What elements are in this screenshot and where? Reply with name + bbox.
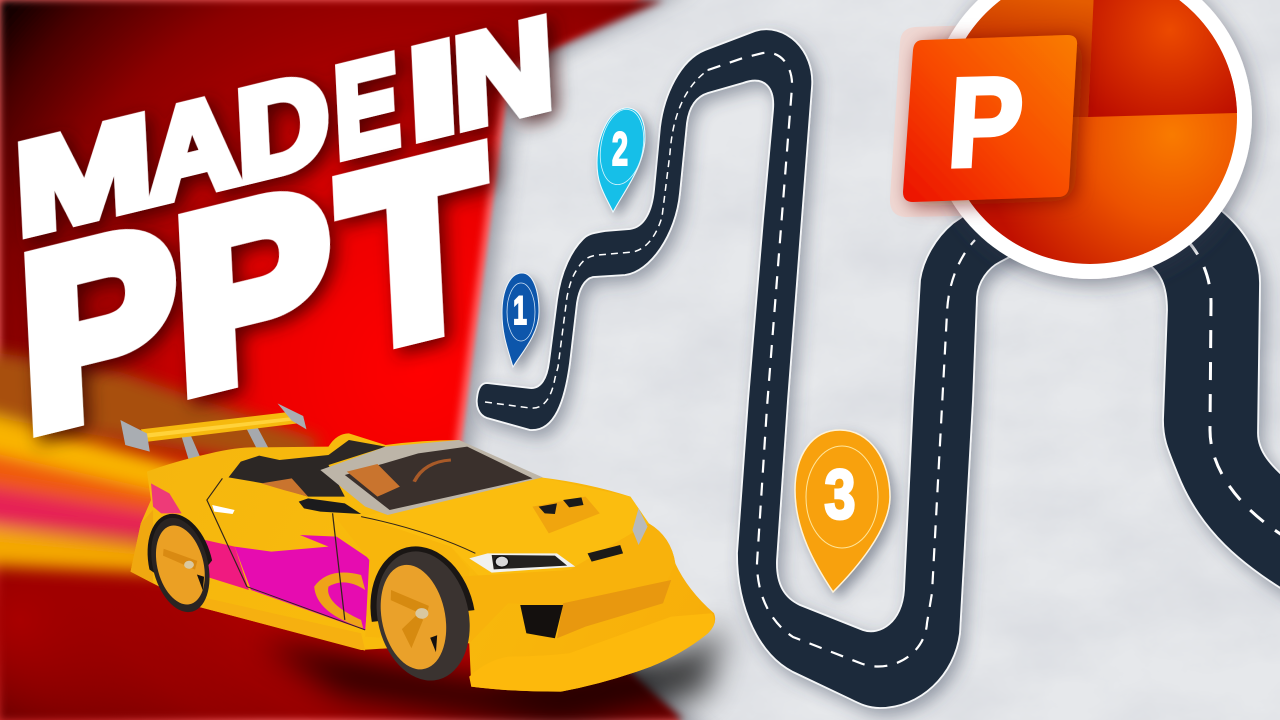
pin 3: 3 — [824, 456, 856, 533]
steering wheel — [414, 460, 451, 482]
air intake — [520, 605, 563, 638]
lane dashes: first stretch — [485, 70, 708, 408]
front fender — [333, 513, 469, 643]
logo square halo — [890, 24, 1010, 217]
road surface — [477, 29, 1280, 708]
logo square — [903, 35, 1077, 202]
front cockpit — [345, 447, 532, 510]
lane dashes: long stretch — [708, 53, 975, 667]
hood panel — [361, 477, 649, 577]
red diagonal background panel — [0, 0, 714, 720]
door lines — [207, 478, 475, 630]
title: MADE IN — [12, 0, 556, 263]
flame swirl — [314, 573, 365, 628]
rear cockpit — [229, 440, 386, 497]
front seat — [347, 464, 400, 497]
title: PPT: T — [336, 96, 493, 404]
title: MADE IN: I — [405, 12, 460, 168]
pin 2 — [595, 106, 649, 212]
title: MADE IN: M — [12, 86, 155, 263]
front bumper — [459, 523, 675, 643]
rear seat — [261, 478, 308, 497]
pin 1 — [502, 273, 539, 367]
headlight — [469, 553, 575, 573]
front lip — [469, 613, 714, 692]
title: PPT — [15, 96, 493, 483]
hood vents — [539, 503, 557, 514]
title: MADE IN: A — [143, 65, 242, 231]
side shade and sill — [198, 597, 365, 651]
motion streaks behind car — [0, 350, 320, 575]
title: PPT: P — [169, 134, 338, 445]
title: PPT: P — [15, 172, 184, 483]
title: MADE IN: E — [331, 26, 402, 186]
door flame — [235, 535, 371, 630]
right headlight — [632, 508, 648, 545]
windshield frame — [320, 440, 543, 515]
logo circle with white ring — [928, 0, 1252, 279]
pin 1: 1 — [513, 289, 527, 334]
door handle — [212, 505, 235, 514]
car shadow — [260, 625, 725, 720]
front wheel — [360, 541, 486, 686]
bumper orange grille — [557, 580, 671, 638]
rear flame — [151, 483, 182, 513]
spoiler — [120, 403, 306, 461]
title: MADE IN: D — [233, 43, 332, 210]
PowerPoint logo — [890, 0, 1252, 279]
rear wheel — [138, 510, 222, 616]
pin 2: 2 — [612, 124, 628, 176]
lane dashes: right stretch — [1187, 240, 1280, 540]
car — [120, 403, 715, 692]
logo letter P: P — [945, 51, 1027, 194]
grille slit — [588, 545, 623, 562]
hood scoop — [532, 497, 600, 533]
side mirror — [299, 498, 361, 514]
pin 3 — [795, 430, 890, 592]
car body — [131, 433, 715, 692]
road — [477, 29, 1280, 708]
